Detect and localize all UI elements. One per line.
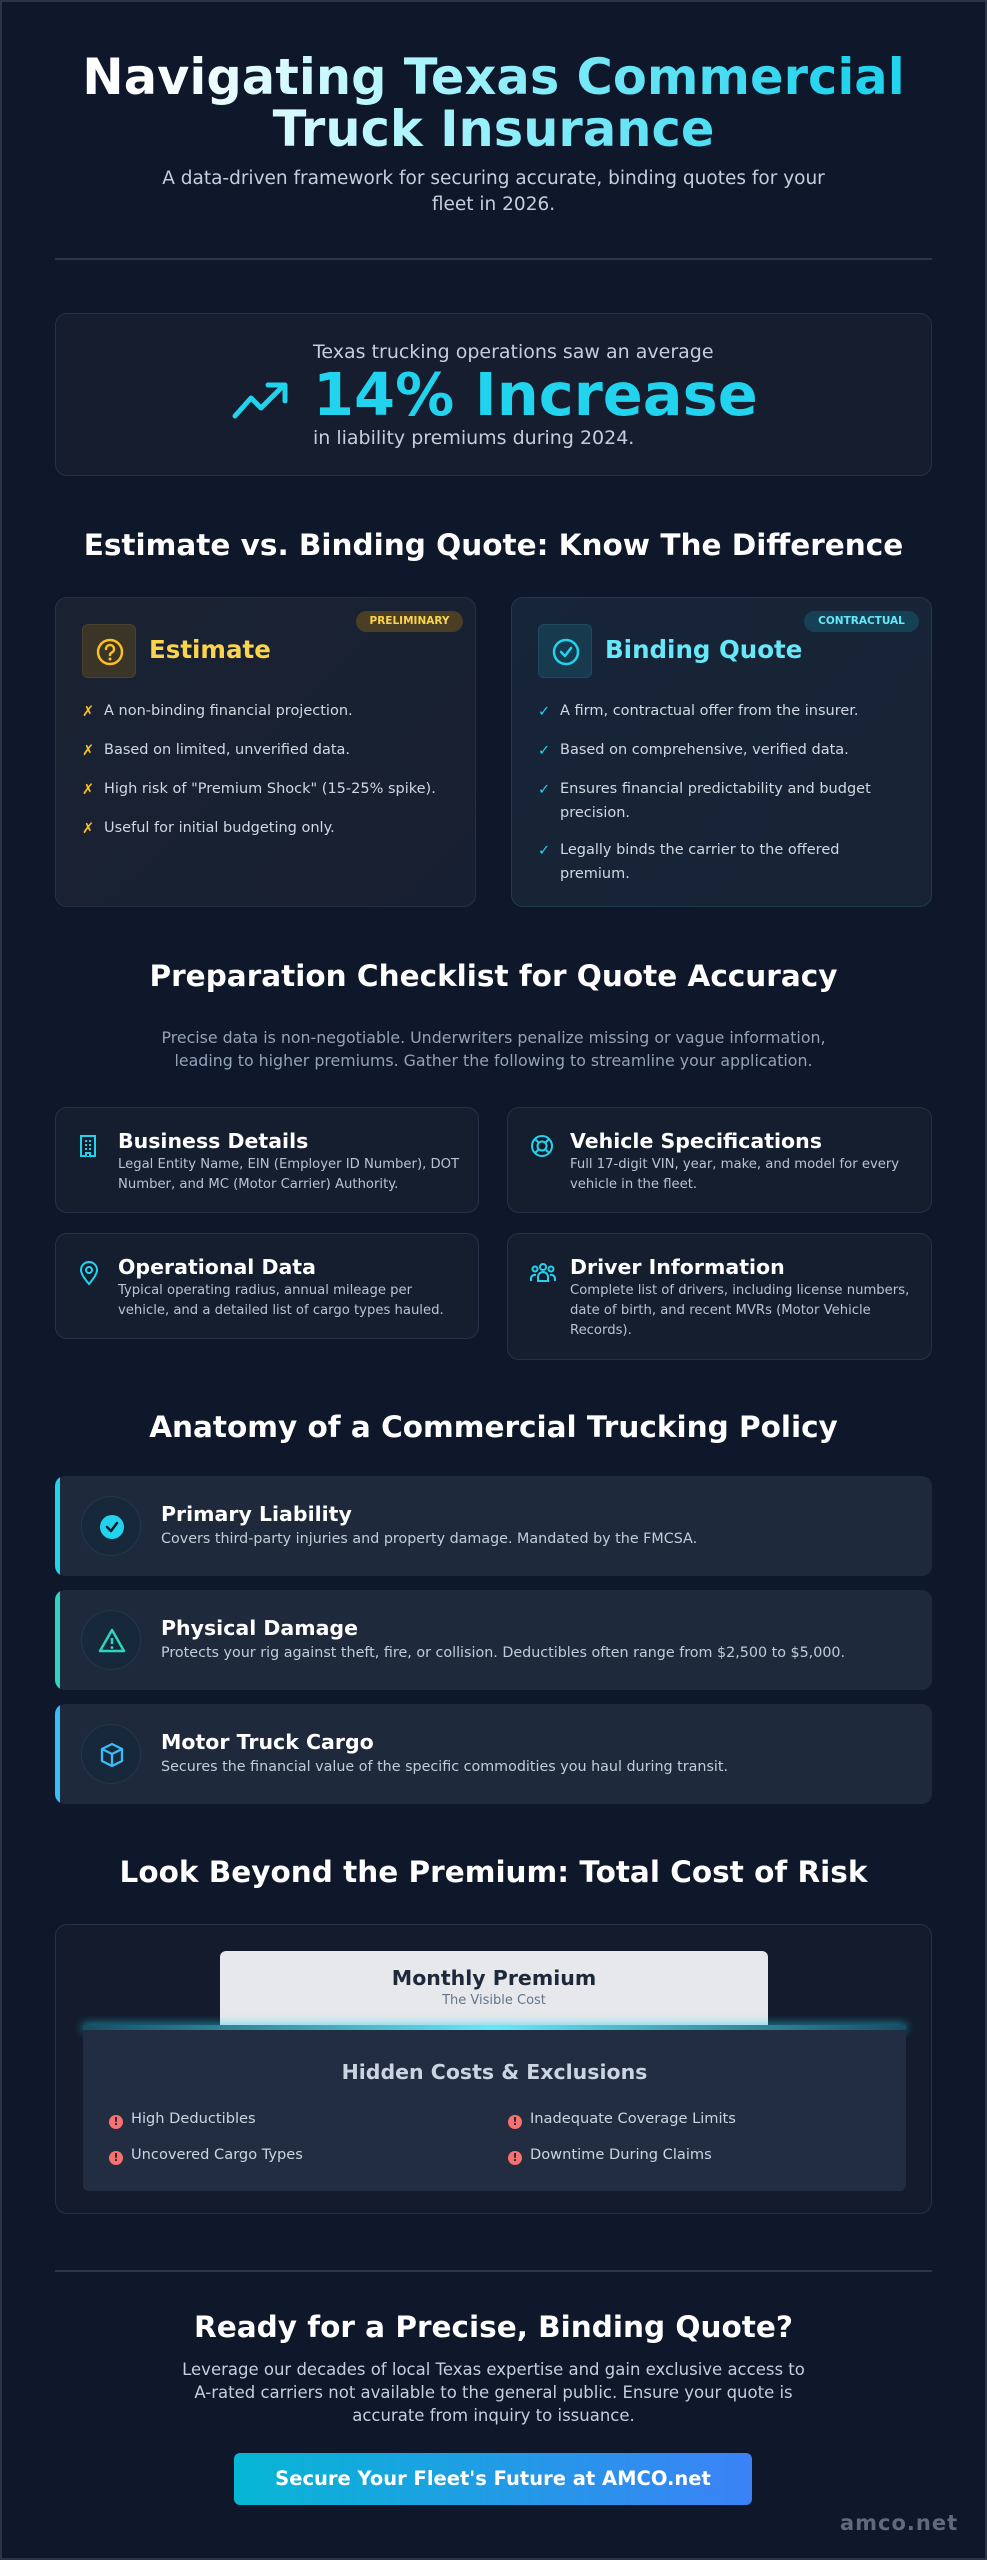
binding bullets: ✓ bbox=[538, 743, 550, 759]
icon: building bbox=[80, 1135, 96, 1157]
visible cost card: Monthly Premium bbox=[392, 1966, 596, 1990]
stat text: 14% Increase bbox=[313, 360, 758, 429]
hidden costs block: Downtime During Claims bbox=[530, 2146, 712, 2163]
checklist: driver info bbox=[507, 1233, 932, 1360]
checklist: vehicle specs: Vehicle Specifications bbox=[570, 1129, 822, 1153]
binding bullets: ✓ bbox=[538, 704, 550, 720]
estimate bullets bbox=[82, 703, 436, 837]
CTA text: Leverage our decades of local Texas expertise and gain exclusive access to A-rated carriers not available to the general public. Ensure your quote is accurate from inquiry to issuance. bbox=[182, 2360, 805, 2425]
checklist: business details: Legal Entity Name, EIN (Employer ID Number), DOT Number, and MC (Motor Carrier) Authority. bbox=[118, 1157, 459, 1192]
checklist: business details bbox=[55, 1107, 479, 1213]
hidden costs block: Uncovered Cargo Types bbox=[131, 2146, 303, 2163]
hidden costs block: ! bbox=[512, 2115, 518, 2128]
checklist: operational data: Operational Data bbox=[118, 1255, 316, 1279]
panel: estimate bbox=[55, 597, 476, 907]
estimate bullets: Useful for initial budgeting only. bbox=[104, 820, 335, 836]
icon: box bbox=[81, 1724, 141, 1784]
policy: primary liability bbox=[55, 1476, 932, 1576]
visible cost card: The Visible Cost bbox=[442, 1993, 546, 2008]
title bbox=[0, 51, 987, 155]
binding quote title: Binding Quote bbox=[605, 635, 802, 664]
policy: physical damage: Physical Damage bbox=[161, 1616, 358, 1640]
policy: cargo: Motor Truck Cargo bbox=[161, 1730, 374, 1754]
waterline bbox=[83, 2025, 906, 2030]
stat text: Texas trucking operations saw an average bbox=[313, 341, 714, 363]
badge: preliminary bbox=[356, 611, 463, 632]
binding bullets bbox=[538, 703, 871, 882]
estimate bullets: ✗ bbox=[82, 743, 94, 759]
checklist: driver info: Driver Information bbox=[570, 1255, 785, 1279]
icon: trending arrow bbox=[232, 382, 288, 418]
stat text bbox=[312, 341, 758, 449]
subtitle: fleet in 2026. bbox=[432, 194, 555, 215]
binding bullets: Ensures financial predictability and budget precision. bbox=[560, 781, 871, 821]
heading: estimate vs binding: Estimate vs. Binding Quote: Know The Difference bbox=[84, 528, 903, 562]
title: Navigating Texas Commercial bbox=[82, 48, 905, 106]
panel: binding quote bbox=[511, 597, 932, 907]
checklist: driver info: Complete list of drivers, including license numbers, date of birth, and recent MVRs (Motor Vehicle Records). bbox=[570, 1283, 909, 1338]
binding bullets: ✓ bbox=[538, 782, 550, 798]
policy: primary liability: Covers third-party injuries and property damage. Mandated by the FMCSA. bbox=[161, 1531, 697, 1547]
hidden costs block: Inadequate Coverage Limits bbox=[530, 2110, 736, 2127]
icon: shield check bbox=[81, 1496, 141, 1556]
policy: cargo bbox=[55, 1704, 932, 1804]
CTA heading: Ready for a Precise, Binding Quote? bbox=[194, 2310, 793, 2344]
stat panel: 14% increase bbox=[55, 313, 932, 476]
heading: anatomy: Anatomy of a Commercial Trucking Policy bbox=[149, 1410, 838, 1444]
icon: map pin bbox=[80, 1261, 98, 1286]
icon: question bbox=[82, 624, 136, 678]
checklist: operational data bbox=[55, 1233, 479, 1339]
binding bullets: Legally binds the carrier to the offered premium. bbox=[560, 842, 839, 882]
heading: total cost of risk: Look Beyond the Premium: Total Cost of Risk bbox=[120, 1855, 867, 1889]
estimate bullets: ✗ bbox=[82, 704, 94, 720]
estimate bullets: High risk of "Premium Shock" (15-25% spike). bbox=[104, 781, 436, 797]
checklist intro: Precise data is non-negotiable. Underwriters penalize missing or vague information, leading to higher premiums. Gather the following to streamline your application. bbox=[161, 1028, 826, 1070]
hidden costs block: ! bbox=[113, 2115, 119, 2128]
hidden costs block: ! bbox=[512, 2151, 518, 2164]
estimate bullets: A non-binding financial projection. bbox=[104, 703, 353, 719]
subtitle: A data-driven framework for securing accurate, binding quotes for your bbox=[162, 168, 825, 189]
policy: physical damage: Protects your rig against theft, fire, or collision. Deductibles often range from $2,500 to $5,000. bbox=[161, 1645, 845, 1661]
checklist: vehicle specs: Full 17-digit VIN, year, make, and model for every vehicle in the fleet. bbox=[570, 1157, 899, 1192]
badge: preliminary: PRELIMINARY bbox=[370, 615, 449, 627]
icon: check circle bbox=[538, 624, 592, 678]
heading: checklist: Preparation Checklist for Quote Accuracy bbox=[150, 959, 837, 993]
watermark: amco.net bbox=[840, 2511, 958, 2535]
estimate bullets: ✗ bbox=[82, 782, 94, 798]
checklist: vehicle specs bbox=[507, 1107, 932, 1213]
CTA button bbox=[234, 2453, 752, 2505]
hidden costs block bbox=[83, 2030, 906, 2191]
estimate bullets: Based on limited, unverified data. bbox=[104, 742, 350, 758]
policy: physical damage bbox=[55, 1590, 932, 1690]
panel: iceberg cost diagram bbox=[55, 1924, 932, 2214]
icon: lifebuoy bbox=[531, 1135, 553, 1157]
estimate bullets: ✗ bbox=[82, 821, 94, 837]
badge: contractual bbox=[804, 611, 919, 632]
CTA button: Secure Your Fleet's Future at AMCO.net bbox=[275, 2467, 711, 2490]
binding bullets: ✓ bbox=[538, 843, 550, 859]
binding bullets: Based on comprehensive, verified data. bbox=[560, 742, 849, 758]
title: Truck Insurance bbox=[273, 100, 714, 158]
binding bullets: A firm, contractual offer from the insurer. bbox=[560, 703, 859, 719]
estimate title: Estimate bbox=[149, 635, 271, 664]
checklist: business details: Business Details bbox=[118, 1129, 308, 1153]
stat text: in liability premiums during 2024. bbox=[313, 427, 634, 449]
visible cost card bbox=[220, 1951, 768, 2025]
icon: users bbox=[530, 1263, 556, 1282]
policy: cargo: Secures the financial value of the specific commodities you haul during transit. bbox=[161, 1759, 728, 1775]
subtitle bbox=[162, 168, 825, 215]
badge: contractual: CONTRACTUAL bbox=[818, 615, 905, 627]
hidden costs block: ! bbox=[113, 2151, 119, 2164]
hidden costs block: Hidden Costs & Exclusions bbox=[342, 2060, 647, 2084]
checklist: operational data: Typical operating radius, annual mileage per vehicle, and a detailed list of cargo types hauled. bbox=[118, 1283, 444, 1318]
icon: warning bbox=[81, 1610, 141, 1670]
hidden costs block: High Deductibles bbox=[131, 2110, 256, 2127]
policy: primary liability: Primary Liability bbox=[161, 1502, 352, 1526]
